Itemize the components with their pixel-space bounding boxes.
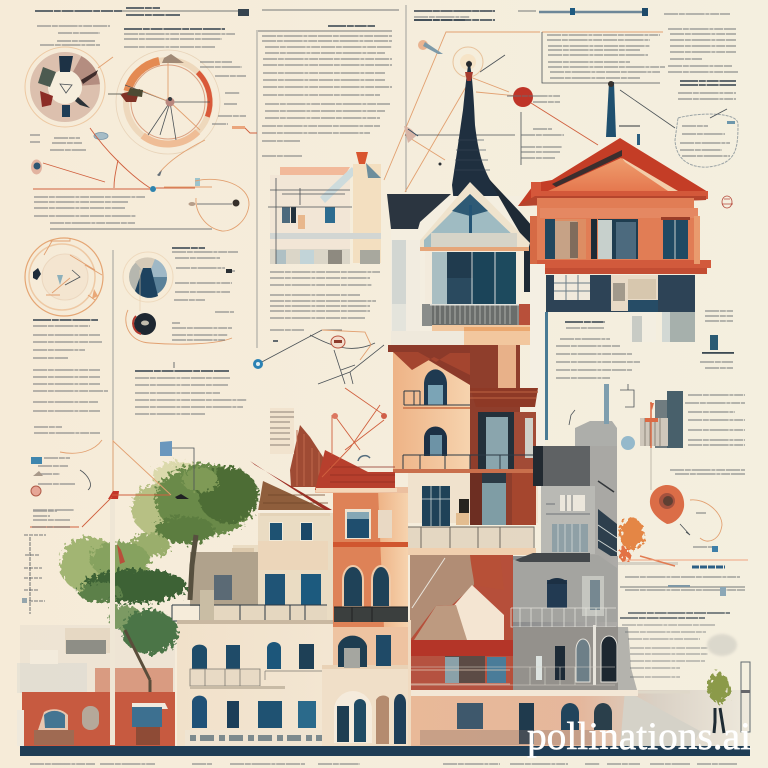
- chart: large ring diagram: [108, 43, 257, 161]
- icon: red ball: [513, 87, 533, 107]
- spire annotation lines: [384, 32, 675, 192]
- right annotation: skyscraper chart: [569, 384, 683, 490]
- building: balcony storey: [407, 473, 538, 555]
- chart: blue pie: [123, 252, 173, 302]
- connector lines: [33, 128, 212, 192]
- icon: orange foliage burst: [620, 518, 644, 563]
- text block: top centre: [124, 29, 235, 47]
- text: right block: [670, 395, 745, 474]
- bottom caption row: [30, 763, 737, 765]
- building: lower brown block: [388, 345, 541, 473]
- text block: main column: [258, 26, 392, 156]
- text block: far right: [668, 29, 738, 99]
- header rule and labels: [35, 8, 730, 20]
- text: small legend: [30, 135, 86, 150]
- street tree: [60, 461, 258, 692]
- building: cream left house lower: [177, 620, 335, 746]
- icon: orange eye sphere: [650, 485, 684, 524]
- sketch: contour face: [680, 500, 722, 552]
- building: orange gabled house: [518, 81, 711, 274]
- building: base storey: [410, 690, 750, 747]
- building: main gabled tower: [387, 178, 532, 346]
- building: red pitched roof: [290, 425, 397, 492]
- icon: blue box label: [160, 441, 194, 490]
- text block: middle left: [34, 197, 212, 229]
- right band with heading: [618, 556, 748, 596]
- text: right lower block: [620, 613, 737, 677]
- text block: top left: [37, 26, 110, 45]
- watermark: pollinations.ai: [527, 715, 751, 758]
- building: orange arcaded block: [315, 487, 408, 628]
- vertical divider lines: [113, 5, 406, 500]
- text block: left column: [33, 320, 108, 433]
- ground strip: [20, 746, 750, 756]
- text: under house panel: [556, 311, 734, 378]
- icon: red stamp: [722, 196, 733, 208]
- text: ring annotations: [200, 62, 246, 129]
- chart: orange orbit diagram: [25, 238, 103, 316]
- building: red abstract storey: [410, 555, 513, 692]
- building: grey corner block: [410, 421, 637, 690]
- network over roof: [322, 388, 387, 477]
- building: cream left house upper: [172, 461, 333, 622]
- blueprint house sketch: [268, 152, 381, 264]
- text block: below sketch: [270, 272, 380, 341]
- lamp post with node: [30, 440, 189, 745]
- text: left lower notes: [22, 440, 102, 614]
- text: ball labels: [507, 96, 564, 158]
- building: arched entrance: [322, 620, 411, 747]
- icon: blue oval: [94, 132, 108, 140]
- building: low red house: [17, 625, 175, 746]
- callout: dashed oval notes: [675, 109, 738, 167]
- text: top right column: [414, 11, 495, 20]
- text box: top right: [542, 32, 665, 83]
- chart: sector wheel: [25, 47, 113, 127]
- building: navy mid storey: [530, 264, 695, 494]
- text block: centre: [135, 362, 247, 414]
- tree and pole at right: [708, 662, 750, 733]
- callout loop with dot: [188, 179, 249, 231]
- building: tall spire: [452, 60, 508, 203]
- icon: navy and red marker: [31, 160, 42, 174]
- hatched sign board: [270, 408, 294, 454]
- chart: dark disc in outlined oval: [126, 270, 232, 344]
- network lines and blue node: [253, 330, 384, 384]
- text: pie annotations: [172, 248, 238, 340]
